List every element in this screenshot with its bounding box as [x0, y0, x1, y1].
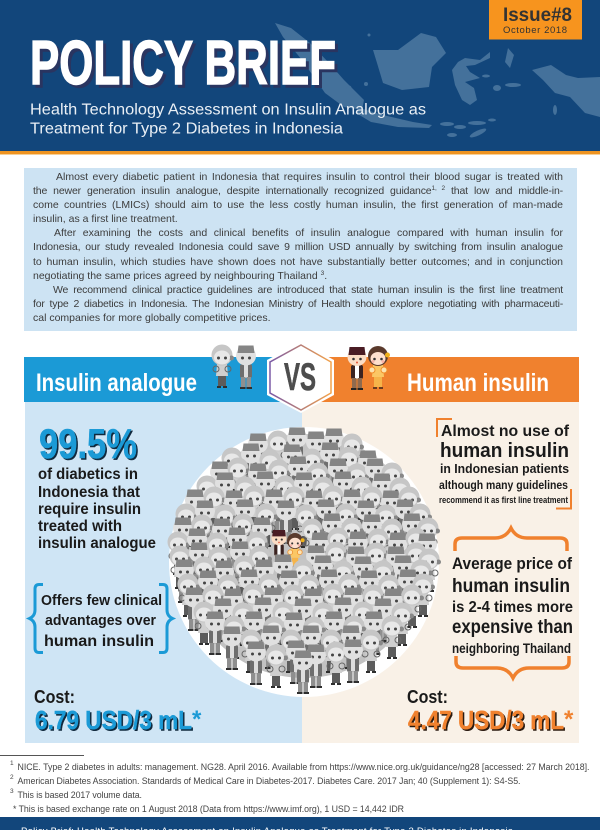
callout: average price comparison: is 2-4 times more	[452, 599, 573, 616]
cost: human insulin: 4.47 USD/3 mL	[410, 706, 566, 736]
panel: introduction summary text: the newer generation insulin analogue, despite internationally recognized guidance1, 2 that low and middle-in-	[33, 185, 563, 197]
title: POLICY BRIEF	[30, 29, 336, 98]
panel: introduction summary text: come countries (LMICs) should aim to use the less costly human insulin, the first generation of man-made	[33, 199, 563, 211]
cost: human insulin	[407, 687, 574, 736]
panel: introduction summary text	[24, 168, 577, 331]
callout: few clinical advantages: Offers few clinical	[41, 593, 162, 609]
bar: human insulin heading: Human insulin	[407, 369, 549, 397]
text: share of diabetics	[38, 466, 156, 552]
issue badge: October 2018	[503, 25, 567, 36]
callout: average price comparison: human insulin	[452, 576, 570, 597]
subtitle: Treatment for Type 2 Diabetes in Indonesia	[30, 120, 343, 138]
stat: 99.5%: 99.5%	[39, 420, 137, 467]
cost: insulin analogue	[34, 687, 202, 736]
bar: insulin analogue heading: Insulin analogue	[36, 369, 197, 397]
VS hexagon	[267, 342, 334, 413]
callout: almost no use of human insulin: recommend it as first line treatment	[439, 495, 569, 506]
footnotes: This is based 2017 volume data.	[18, 790, 142, 800]
footnotes: NICE. Type 2 diabetes in adults: management. NG28. April 2016. Available from https://www.nice.org.uk/guidance/ng28 [accessed: 27 March 2018].	[18, 762, 590, 772]
cost: insulin analogue: Cost:	[34, 687, 75, 707]
panel: introduction summary text: insulin, as a first line treatment.	[33, 213, 178, 225]
cost: human insulin: *	[564, 706, 574, 733]
panel: introduction summary text: to human insulin, which studies have shown does not have substantially better outcomes; and in conjunction	[33, 256, 563, 268]
icon: grey couple	[212, 344, 256, 389]
callout: few clinical advantages: advantages over	[45, 613, 156, 629]
panel: human insulin background	[302, 402, 579, 743]
map of Indonesia	[275, 23, 600, 139]
VS hexagon: VS	[284, 356, 316, 399]
text: share of diabetics: Indonesia that	[38, 484, 140, 501]
footnotes	[0, 755, 590, 814]
footnotes: * This is based exchange rate on 1 August 2018 (Data from https://www.imf.org), 1 USD = 14,442 IDR	[13, 804, 404, 814]
header banner	[0, 0, 600, 155]
callout: almost no use of human insulin: although many guidelines	[439, 480, 568, 492]
icon: coloured couple	[348, 346, 390, 390]
footnotes: 3	[10, 788, 14, 795]
crowd circle	[168, 427, 441, 697]
subtitle	[30, 102, 426, 138]
text: share of diabetics: treated with	[38, 518, 122, 535]
callout: few clinical advantages	[30, 584, 172, 652]
title: POLICY BRIEF	[33, 32, 339, 101]
panel: introduction summary text: After examining the costs and clinical benefits of insulin analogue compared with human insulin for	[54, 227, 563, 239]
callout: almost no use of human insulin: in Indonesian patients	[440, 461, 569, 476]
callout: almost no use of human insulin: human insulin	[440, 440, 569, 462]
callout: average price comparison	[452, 528, 573, 678]
footnotes: 1	[10, 760, 14, 767]
bar: insulin analogue heading	[24, 357, 302, 402]
panel: introduction summary text: Almost every diabetic patient in Indonesia that requires insulin to control their blood sugar is treated with	[56, 171, 563, 183]
footnotes: American Diabetes Association. Standards of Medical Care in Diabetes-2017. Diabetes Care. 2017 Jan; 40 (Supplement 1): S4-S5.	[18, 776, 520, 786]
callout: few clinical advantages: human insulin	[44, 633, 154, 650]
callout: average price comparison: neighboring Thailand	[452, 641, 571, 656]
title	[30, 29, 339, 101]
issue badge	[489, 0, 582, 40]
callout: average price comparison: Average price of	[452, 554, 572, 573]
bar: human insulin heading	[302, 357, 579, 402]
text: share of diabetics: require insulin	[38, 501, 141, 518]
issue badge: Issue#8	[503, 5, 572, 26]
subtitle: Health Technology Assessment on Insulin Analogue as	[30, 102, 426, 118]
cost: insulin analogue: *	[192, 706, 202, 733]
panel: introduction summary text: negotiating the same prices agreed by neighbouring Thailand 3.	[33, 270, 327, 282]
callout: average price comparison: expensive than	[452, 617, 573, 638]
panel: insulin analogue background	[25, 402, 302, 743]
panel: introduction summary text: Indonesia, our study revealed Indonesia could save 9 million USD annually by switching from insulin analogue	[33, 241, 563, 253]
cost: human insulin: 4.47 USD/3 mL	[408, 705, 564, 735]
cost: insulin analogue: 6.79 USD/3 mL	[36, 706, 194, 736]
panel: introduction summary text: We recommend clinical practice guidelines are introduced that state human insulin is the first line treatment	[53, 284, 563, 296]
panel: introduction summary text: cal companies for more globally competitive prices.	[33, 312, 271, 324]
text: share of diabetics: insulin analogue	[38, 535, 156, 552]
figures: highlighted coloured couple	[271, 530, 305, 567]
footer bar	[0, 817, 600, 830]
cost: human insulin: Cost:	[407, 687, 448, 707]
stat: 99.5%: 99.5%	[40, 422, 138, 468]
text: share of diabetics: of diabetics in	[38, 466, 138, 483]
callout: almost no use of human insulin: Almost no use of	[441, 423, 570, 440]
cost: insulin analogue: 6.79 USD/3 mL	[35, 705, 192, 735]
panel: introduction summary text: for type 2 diabetics in Indonesia. The Indonesian Ministry of Health should explore negotiating with pharmaceuti-	[33, 298, 563, 310]
footnotes: 2	[10, 774, 14, 781]
callout: almost no use of human insulin	[437, 419, 571, 508]
